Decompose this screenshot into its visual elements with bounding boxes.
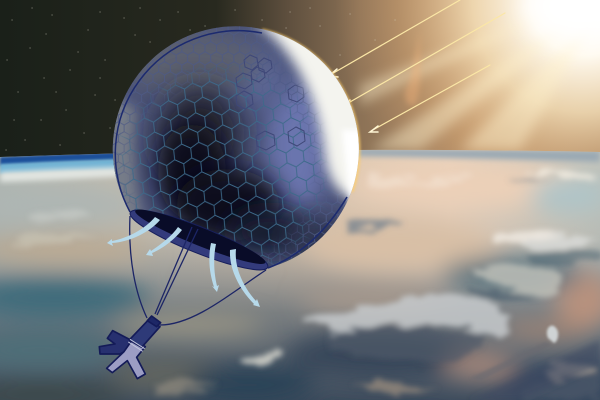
solar heat arrows xyxy=(329,0,505,132)
background: space sky with sun glare xyxy=(0,0,600,170)
sun rays xyxy=(360,0,600,150)
arrow: sunlight 2 xyxy=(342,13,505,107)
periwinkle lit area xyxy=(266,80,330,210)
hexagon cells xyxy=(115,66,326,265)
left grey rim xyxy=(112,96,146,212)
dark arms xyxy=(99,331,131,354)
solar glow rim xyxy=(262,30,359,192)
dark shadow side xyxy=(160,87,240,183)
arrow: air out 4 xyxy=(230,249,260,307)
balloon opening rim xyxy=(125,201,273,279)
atmosphere band xyxy=(0,154,114,167)
sunlit white crescent xyxy=(250,28,359,205)
highlighted hex cells xyxy=(236,55,305,150)
opening interior xyxy=(132,203,269,271)
cumulus and its shadow xyxy=(470,326,600,400)
arrow: sunlight 3 xyxy=(370,65,490,132)
balloon envelope xyxy=(112,26,359,267)
arrow: air out 3 xyxy=(209,243,219,292)
envelope outline xyxy=(115,31,262,212)
payload: instrument gondola xyxy=(99,316,161,379)
arrow: sunlight 1 xyxy=(329,0,460,77)
stars xyxy=(6,8,395,150)
suspension cables xyxy=(130,216,266,325)
cylinder body xyxy=(129,320,160,347)
arrow: air out 2 xyxy=(146,227,182,256)
upper grey haze xyxy=(120,30,260,94)
arrow: air out 1 xyxy=(107,217,160,246)
white cloud banks xyxy=(10,172,600,400)
colour patches xyxy=(0,163,600,400)
lens flare streak xyxy=(405,30,420,105)
air vent arrows xyxy=(107,217,260,307)
balloon xyxy=(98,26,362,380)
sun disc glare xyxy=(525,0,600,43)
light arms xyxy=(107,339,145,379)
earth: clouds and atmosphere xyxy=(0,150,600,400)
